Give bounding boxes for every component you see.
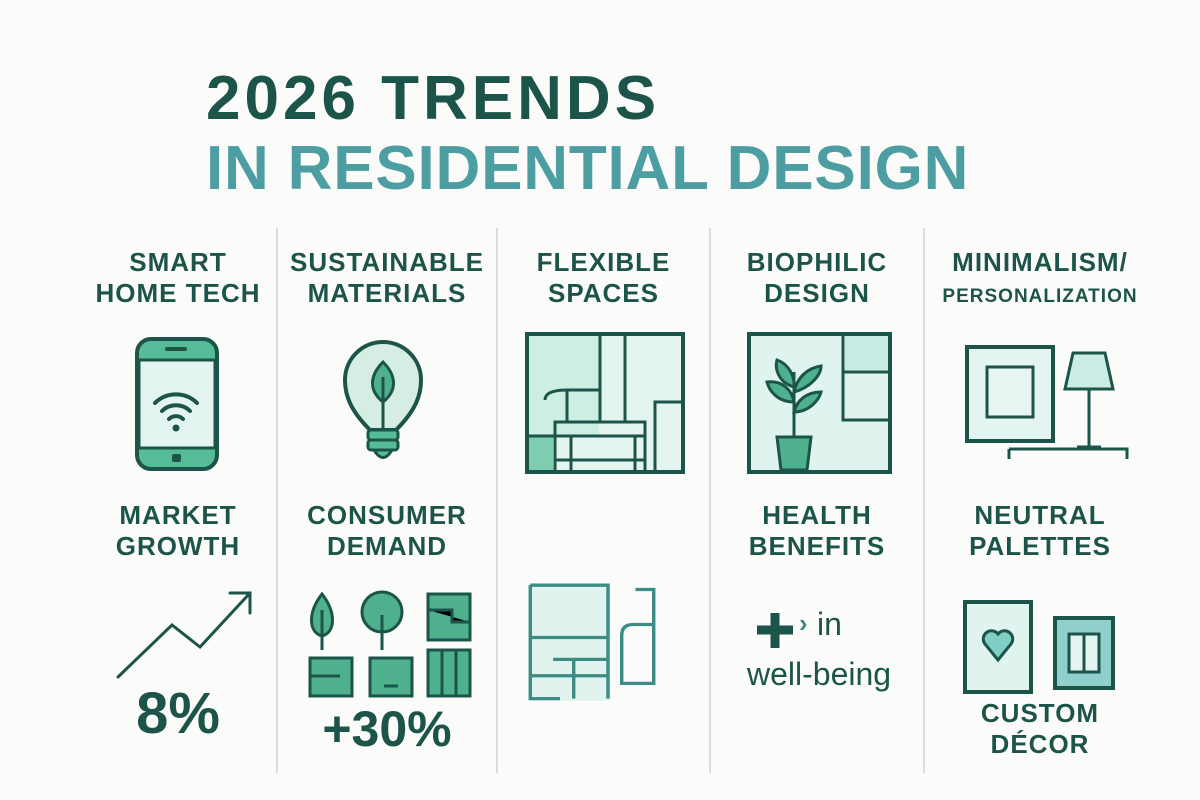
heading (747, 247, 887, 308)
chart: trend line (116, 591, 252, 679)
heading: FLEXIBLE (537, 247, 670, 277)
heading: SMART (129, 247, 227, 277)
heading: MATERIALS (308, 278, 466, 308)
text: custom decor (981, 698, 1099, 759)
heading (290, 247, 484, 308)
heading: HOME TECH (96, 278, 260, 308)
icon: decor (963, 600, 1115, 694)
subheading: GROWTH (116, 531, 240, 561)
subheading (749, 500, 885, 561)
callout: well-being (747, 606, 891, 692)
heading (96, 247, 260, 308)
text: custom decor: DÉCOR (991, 729, 1089, 759)
subheading (116, 500, 240, 561)
callout: well-being: › (799, 608, 808, 638)
subheading: BENEFITS (749, 531, 885, 561)
callout: well-being: well-being (747, 656, 891, 692)
icon: bulb with leaf (343, 340, 423, 459)
stat: 8% (136, 681, 220, 746)
subheading: DEMAND (327, 531, 447, 561)
heading: PERSONALIZATION (942, 286, 1138, 307)
heading: DESIGN (764, 278, 870, 308)
heading: MINIMALISM/ (952, 247, 1128, 277)
icon: room layout (528, 584, 656, 701)
subheading (307, 500, 467, 561)
subheading: PALETTES (969, 531, 1111, 561)
icon: plus (757, 613, 793, 648)
subheading: NEUTRAL (974, 500, 1106, 530)
title: 2026 TRENDS (206, 64, 660, 133)
panel: flexible spaces (525, 247, 685, 701)
icon grid: materials (308, 590, 472, 698)
subheading: CONSUMER (307, 500, 467, 530)
stat: +30% (322, 701, 452, 757)
icon: plant in room (747, 332, 892, 474)
heading (942, 247, 1138, 307)
icon: floor plan (525, 332, 685, 474)
callout: well-being: in (817, 606, 842, 642)
heading: SPACES (548, 278, 659, 308)
heading: BIOPHILIC (747, 247, 887, 277)
subheading: HEALTH (762, 500, 872, 530)
subheading (969, 500, 1111, 561)
panel: minimalism / personalization (942, 247, 1138, 759)
icon: frame and lamp (965, 345, 1128, 459)
title (206, 64, 969, 203)
icon: phone (135, 337, 219, 471)
text: custom decor: CUSTOM (981, 698, 1099, 728)
title: IN RESIDENTIAL DESIGN (206, 134, 969, 203)
subheading: MARKET (119, 500, 237, 530)
panel: smart home tech (96, 247, 260, 746)
panel: biophilic design (747, 247, 892, 692)
heading (537, 247, 670, 308)
heading: SUSTAINABLE (290, 247, 484, 277)
panel: sustainable materials (290, 247, 484, 757)
